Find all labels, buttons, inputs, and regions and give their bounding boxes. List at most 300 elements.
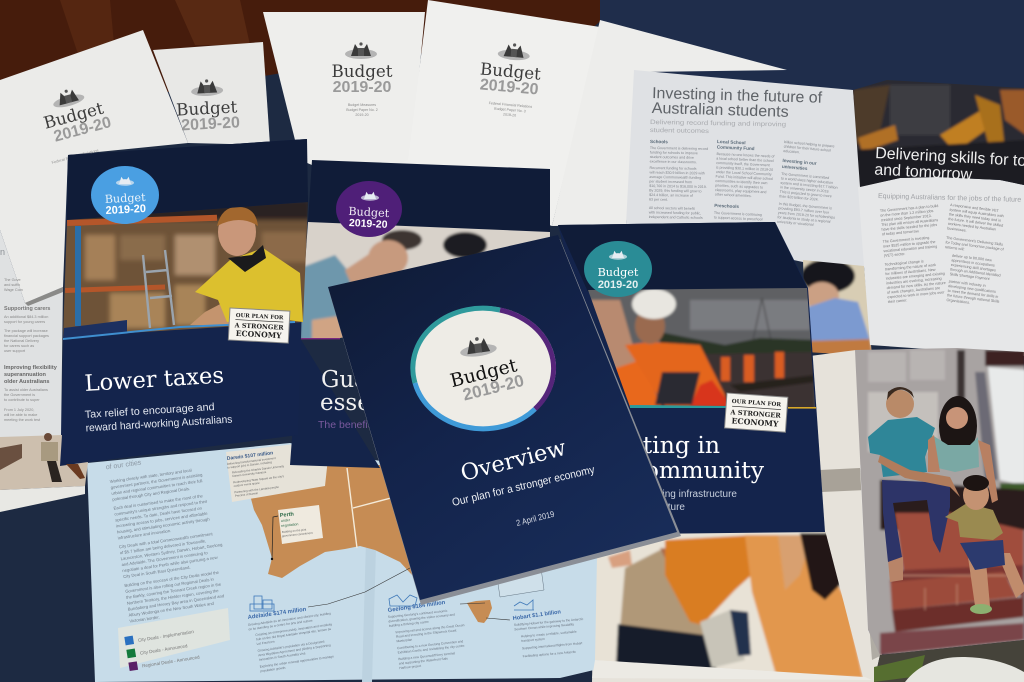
document: Budget paper 3: [263, 12, 425, 170]
column 2: to support access to preschool: [714, 215, 763, 222]
text: Supporting carers: [4, 306, 50, 312]
icon: Adelaide: [250, 596, 274, 611]
circle logo: [336, 181, 402, 237]
text: To assist older Australians: [4, 388, 48, 392]
icon: Geelong: [389, 595, 417, 606]
column 1: per student increased from: [649, 179, 692, 184]
Geelong section: Improving rail and access along the Great Ocean: [395, 623, 465, 634]
column 2: [714, 139, 775, 222]
subtitle: Tax relief to encourage and: [84, 401, 215, 421]
Darwin callout: Darwin University Campus: [232, 470, 267, 478]
document: Budget paper 2: [153, 42, 270, 145]
column 2: community itself, the Government: [716, 161, 770, 167]
left page text: Working closely with state, territory and local: [109, 468, 192, 484]
footer strip: [592, 660, 872, 680]
left page text: of our cities: [105, 459, 142, 471]
left page text: Building on the success of the City Deals model the: [124, 570, 220, 588]
label: Budget: [41, 98, 106, 133]
heading: [651, 85, 823, 122]
text: for carers such as: [4, 344, 34, 348]
column 2: Preschools: [714, 203, 740, 209]
circle logo: 2019-20: [349, 217, 388, 231]
Adelaide section: hub on the old Royal Adelaide Hospital site, known as: [256, 627, 332, 642]
body column 1: transforming the nature of work: [885, 263, 936, 271]
column 1: [649, 139, 708, 220]
document: blank sheet: [552, 20, 787, 226]
column 2: priorities, such as upgrades to: [715, 183, 763, 190]
body column 1: for millions of Australians. New: [885, 268, 936, 276]
body column 1: industries are evolving, increasing: [886, 277, 942, 285]
photo: rail workers: [585, 285, 817, 410]
column 1: student outcomes and drive: [650, 155, 694, 160]
Hobart section: Facilitating options for a new Antarctic: [523, 650, 577, 658]
column 2: communities to identify their own: [715, 179, 768, 185]
label: 2019-20: [461, 371, 526, 405]
label: 2019-20: [52, 114, 113, 146]
Geelong section: Masterplan: [396, 638, 413, 643]
caption: Federal Financial Relations: [51, 148, 99, 165]
crest: [458, 335, 498, 359]
label: 2019-20: [479, 76, 539, 98]
column 2: The Government is continuing: [714, 211, 762, 217]
Adelaide section: Innovation in South Australia visa: [259, 651, 306, 662]
text: the National Delivery: [4, 339, 39, 343]
column 1: All school sectors will benefit: [649, 206, 695, 211]
body column 2: Skills Shortage Payment: [949, 272, 990, 281]
left page text: Each deal is customised to make the most of the: [113, 493, 204, 511]
body column 1: on the more than 1.2 million jobs: [880, 209, 934, 218]
left page text: Victorian border.: [129, 614, 160, 624]
column 3: universities: [782, 164, 808, 171]
heading: Investing in the future of: [652, 85, 823, 107]
person: [41, 433, 85, 482]
column 3: The Government is committed: [781, 172, 829, 180]
body column 1: Technological change is: [884, 259, 924, 267]
stamp: ECONOMY: [236, 329, 282, 340]
caption: [346, 103, 378, 117]
Perth callout: [271, 505, 323, 560]
stone column: [866, 585, 882, 660]
body column 1: over $525 million to upgrade the: [883, 240, 936, 249]
cut-off heading: n: [0, 247, 5, 257]
body column 2: workers needed by Australian: [948, 222, 996, 232]
body column 2: [938, 203, 1011, 308]
subtitle: The benefits: [318, 419, 376, 431]
Geelong section: Geelong $184 million: [387, 600, 446, 614]
column 2: Local School: [717, 139, 746, 145]
left page: [626, 70, 870, 268]
text: From 1 July 2020,: [4, 408, 34, 412]
column 1: with increased funding for public,: [649, 210, 701, 215]
Geelong section: Building a new Queenscliff ferry terminal: [398, 651, 456, 661]
column 3: providing $93.7 million over four: [778, 206, 830, 215]
column 2: Because no one knows the needs of: [716, 152, 775, 159]
column 2: is providing $30.1 million in 2019-20: [716, 165, 773, 172]
body column 2: system will equip Australians with: [949, 208, 1004, 218]
text: meeting the work test: [4, 418, 41, 422]
stamp: OUR PLAN FOR: [236, 313, 284, 321]
legend: City Deals - Announced: [140, 643, 188, 656]
photo: [0, 435, 88, 490]
icon: Hobart: [514, 600, 534, 610]
Darwin callout: Relocating the Charles Darwin University: [232, 464, 285, 474]
body column 1: their career.: [888, 298, 907, 304]
body column 2: deliver up to 80,000 new: [952, 254, 992, 263]
column 1: $10,700 in 2014 to $16,000 in 2019.: [649, 184, 707, 189]
booklet spread: education and skills: [626, 70, 1024, 360]
body column 1: (VET) sector.: [884, 252, 905, 258]
caption: Budget Paper No. 3: [494, 107, 526, 113]
stamp: A STRONGER: [233, 321, 284, 332]
column 3: In this Budget, the Government is: [779, 202, 832, 210]
photo: warehouse: [60, 200, 310, 345]
title: Guaranteeing: [321, 367, 481, 393]
body column 1: of work changes, Australians are: [887, 286, 940, 295]
subheading: Delivering record funding and improving: [650, 119, 787, 128]
caption: Federal Financial Relations: [489, 101, 533, 109]
Adelaide section: Creating an entrepreneurship, innovation and creativity: [255, 622, 333, 637]
label: Budget: [332, 61, 393, 81]
connector: [308, 568, 410, 607]
title: Overview: [458, 435, 569, 487]
column 1: will reach $30.9 billion in 2029 with: [649, 170, 705, 175]
arm: [0, 444, 22, 470]
body column 1: The Government has a plan to build: [880, 204, 939, 213]
child: [945, 475, 1024, 614]
left page text: Launceston, Western Sydney, Darwin, Hobart, Geelong: [120, 542, 223, 561]
body column 2: reforms will:: [945, 245, 965, 251]
white column: [860, 460, 892, 632]
column 2: under the Local School Community: [716, 170, 772, 176]
body column 1: expected to work in more jobs over: [887, 290, 945, 299]
label: Budget: [448, 355, 520, 392]
heading: skills: and tomorrow: [874, 161, 973, 184]
photo page: mother and child: [590, 525, 872, 682]
subtitle: reward hard-working Australians: [85, 414, 233, 434]
booklet: Lower taxes: [60, 139, 310, 466]
booklet: family photo spread: [592, 345, 1024, 682]
Geelong section: diversification, growing the visitor economy and: [388, 612, 455, 623]
text: and suffix: [4, 283, 20, 287]
column 3: billion school helping to prepare: [784, 140, 835, 148]
Geelong section: Harbour project: [399, 664, 421, 670]
Geelong section: Exhibition Centre and revitalising the city centre: [397, 644, 465, 655]
column 3: years from 2019-20 for scholarships: [778, 211, 835, 220]
left page strip: [592, 350, 893, 682]
ground: [874, 640, 1024, 682]
column 3: university or vocational: [777, 220, 814, 227]
left page text: of $5.7 billion are being delivered in Townsville,: [119, 538, 207, 555]
label: [41, 97, 113, 147]
Geelong section: [387, 595, 469, 671]
caption: Budget Measures: [348, 103, 376, 107]
blue rule: [63, 321, 295, 340]
body column 1: created since September 2013.: [881, 214, 932, 222]
Tasmania map: [467, 600, 492, 623]
photo: welding: [850, 78, 1024, 190]
body column 1: vocational education and training: [883, 245, 937, 253]
spine shading: [362, 470, 378, 682]
left page text: and Adelaide. The Government is continuing to: [121, 550, 209, 567]
left page text: the Barkly, covering the Tennant Creek region in the: [126, 581, 222, 600]
teal rule: [630, 405, 726, 408]
text: will be able to make: [4, 413, 37, 417]
body column 1: industries are emerging and existing: [886, 272, 945, 281]
photo: [595, 532, 863, 677]
left page text: specific needs. To date, Deals have focused on: [115, 505, 203, 523]
Tasmania markers: [460, 603, 510, 620]
label: 2019-20: [181, 114, 240, 134]
Adelaide section: Growing Adelaide's population via a Designated: [257, 640, 325, 653]
Adelaide section: Area Migration Agreement and piloting a Supporting: [258, 643, 331, 657]
left page text: City Deals with a total Commonwealth commitment: [119, 531, 214, 549]
Perth callout: government commitment: [282, 531, 313, 538]
column 2: Community Fund: [717, 144, 755, 151]
label: [448, 354, 526, 407]
map: Australia mainland: [250, 465, 412, 578]
left page text: housing, and stimulating economic activity through: [117, 516, 211, 534]
left page text: community's unique strengths and respond to their: [114, 499, 208, 517]
column 3: [777, 140, 842, 229]
body column 2: the future through national Skills: [947, 293, 1000, 304]
subheading: student outcomes: [650, 127, 709, 135]
column 1: $24.4 billion, an increase of: [649, 193, 693, 198]
crest: [345, 42, 377, 59]
text: Improving flexibility: [4, 365, 58, 371]
Hobart section: Supporting international flights from Hobart: [522, 641, 583, 650]
title: Lower taxes: [84, 363, 225, 397]
Hobart section: Solidifying Hobart for the gateway to the Antarctic: [514, 617, 584, 627]
subtitle: for the future: [628, 502, 685, 513]
Darwin callout: Precinct of Darwin: [235, 491, 259, 498]
Adelaide section: Lot Fourteen: [256, 639, 275, 646]
photo: family on steps: [850, 345, 1024, 655]
legend: [118, 608, 230, 671]
column 3: in the university sector in 2019.: [780, 185, 830, 194]
text: The package will increase: [4, 329, 48, 333]
column 3: education.: [783, 149, 800, 154]
title: Investing in: [579, 431, 720, 459]
window band: [820, 468, 866, 492]
crest: [50, 86, 86, 110]
body column 1: This plan will ensure all Australians: [881, 218, 938, 227]
Darwin callout: outdoor event space: [233, 481, 260, 488]
title: [579, 431, 765, 484]
text: older Australians: [4, 379, 50, 385]
body column 2: for Today and Tomorrow package of: [945, 240, 1005, 252]
column 3: This is projected to grow to more: [780, 190, 832, 198]
column 3: to a world class higher education: [781, 176, 833, 185]
Hobart section: [512, 600, 587, 659]
ring: [413, 308, 554, 429]
text: The Gove: [4, 278, 21, 282]
column 1: Schools: [650, 139, 668, 144]
booklet: Guaranteeing essential services: [290, 160, 552, 468]
column 2: a local school better than the school: [716, 156, 774, 163]
legend: Regional Deals - Announced: [142, 654, 200, 669]
circle logo: Budget: [348, 205, 390, 220]
strip: [0, 486, 85, 512]
crest: [497, 42, 531, 61]
text: Wage Com: [4, 288, 23, 292]
caption: 2019-20: [355, 113, 369, 117]
text: support for young carers: [4, 320, 45, 324]
left page text: Albury Wodonga on the New South Wales and: [128, 601, 215, 618]
title: our community: [584, 456, 765, 484]
subtitle: Our plan for a stronger economy: [451, 464, 596, 509]
booklet: Investing in our community: [558, 222, 825, 534]
column 1: The Government is delivering record: [650, 146, 708, 151]
Darwin callout: Delivering transformational investment: [227, 456, 276, 466]
left page text: [105, 450, 232, 624]
stamp: [725, 393, 788, 432]
body column 1: [880, 204, 947, 304]
body column 2: the skills they need today and in: [949, 212, 1001, 223]
document: Budget paper 4: [385, 0, 600, 226]
body column 2: businesses.: [947, 226, 967, 233]
circle logo: Budget: [598, 266, 639, 279]
yellow rule: [788, 407, 816, 409]
grass: [874, 655, 925, 682]
title: [320, 367, 526, 416]
Darwin callout: to support jobs in Darwin, including: [227, 460, 272, 470]
text: user support: [4, 349, 26, 353]
text: An additional $84.3 million: [4, 315, 48, 319]
body column 2: A responsive and flexible VET: [950, 203, 1000, 213]
Hobart section: transport system: [521, 637, 545, 643]
body column 2: through an Additional Identified: [950, 268, 1001, 278]
stamp: [228, 308, 290, 343]
Geelong section: building a thriving city centre: [389, 620, 429, 628]
map: borders: [347, 468, 391, 548]
column 1: funding for schools to improve: [650, 150, 698, 155]
Adelaide section: Adelaide $174 million: [247, 607, 307, 621]
column 1: By 2029, this funding will grow to: [649, 188, 702, 193]
body column 2: developing new qualifications: [948, 284, 996, 294]
Darwin callout: Darwin $107 million: [227, 450, 274, 462]
label: Budget: [176, 96, 238, 120]
band: [63, 320, 127, 338]
column 3: Investing in our: [782, 158, 817, 166]
column 1: independent and Catholic schools: [649, 215, 703, 220]
text: the Government is: [4, 393, 35, 397]
Geelong section: Road and investing in the Shipwreck Coast: [396, 628, 457, 639]
label: [478, 58, 542, 99]
crest: [191, 79, 223, 97]
left page text: urban and regional communities to reach their full: [111, 478, 203, 496]
body column 2: experiencing skill shortages: [951, 263, 996, 272]
body column 1: The Government is investing: [882, 236, 930, 244]
booklet: Overview: [328, 235, 681, 605]
title: essential services: [320, 390, 526, 416]
subheading: skills: Equipping Australians for the jobs of the future: [878, 193, 1021, 204]
Adelaide section: Growing Adelaide as an innovative and vibrant city, building: [248, 611, 331, 627]
heading: skills: [874, 145, 1024, 188]
Perth callout: negotiation: [281, 522, 299, 528]
subheading: [650, 119, 787, 136]
circle logo: Budget: [104, 191, 146, 206]
text: to contribute to super: [4, 398, 40, 402]
stamp: OUR PLAN FOR: [731, 399, 782, 408]
body column 2: to meet the demand for skills in: [947, 289, 999, 299]
Darwin callout: [226, 440, 330, 502]
circle logo: [91, 166, 159, 224]
body column 2: partner with industry in: [949, 279, 986, 288]
Adelaide section: population growth: [260, 666, 286, 673]
left page text: City Deal in South East Queensland.: [123, 565, 191, 579]
purple rule: [300, 338, 340, 339]
column 3: than $20 billion for 2024.: [779, 194, 819, 202]
Darwin callout: Redeveloping State Square as the city's: [233, 474, 285, 484]
column 2: Fund. This initiative will allow school: [715, 174, 773, 181]
Adelaide section: on its standing as a centre for arts and culture: [248, 618, 313, 631]
legend: City Deals - Implementation: [138, 629, 195, 643]
column 2: classrooms, play equipment and: [715, 188, 767, 194]
text: financial support packages: [4, 334, 49, 338]
text: superannuation: [4, 372, 47, 378]
caption: Budget Paper No. 2: [346, 108, 378, 112]
photo: man: [300, 220, 552, 345]
man: [868, 387, 960, 582]
heading: Australian students: [651, 100, 789, 121]
Geelong section: Supporting Geelong's continued economic: [388, 609, 448, 619]
woman: [928, 396, 998, 503]
label: [332, 61, 393, 96]
body column 2: apprentices in occupations: [951, 258, 995, 268]
Hobart section: Helping to create a reliable, sustainable: [521, 630, 577, 638]
column 1: Recurrent funding for schools: [650, 166, 697, 171]
Hobart section: Hobart $1.1 billion: [512, 609, 562, 622]
left page text: government partners, the Government is assisting: [110, 472, 203, 490]
caption: [488, 101, 533, 119]
Adelaide section: [247, 568, 410, 674]
column 3: children for their future school: [784, 144, 831, 153]
caption: 2019-20: [503, 112, 516, 118]
left page text: negotiate a deal for Perth while also pursuing a new: [122, 555, 219, 573]
column 3: for students to study at a regional: [777, 215, 831, 224]
page shadow: [25, 287, 63, 306]
subtitle: Supporting infrastructure: [627, 489, 737, 500]
photo: boy student: [803, 260, 872, 354]
column 1: 63 per cent.: [649, 197, 668, 202]
body column 2: the future. It will deliver the skilled: [948, 217, 1003, 228]
stamp: A STRONGER: [729, 408, 782, 420]
Darwin callout: Partnering with the Larrakia people: [234, 485, 280, 494]
body column 1: of today and tomorrow.: [882, 229, 920, 236]
left page: carers text and photo: [0, 230, 88, 512]
left page text: increasing access to jobs, services and affordable: [116, 511, 208, 529]
badge: [412, 306, 556, 430]
left page text: Government is also rolling out Regional Deals in: [125, 576, 215, 594]
Adelaide section: Exploring the urban renewal opportunities to manage: [260, 654, 334, 669]
column 3: system and is investing $17.7 billion: [780, 181, 838, 190]
Perth callout: Building on the joint: [282, 527, 307, 534]
left page text: Northern Territory, the Hinkler region, covering the: [127, 588, 219, 606]
subtitle: [627, 489, 737, 513]
label: [176, 96, 240, 135]
Hobart section: Southern Ocean while improving liveability: [514, 622, 575, 631]
left page text: infrastructure and innovation.: [117, 528, 172, 540]
document: Budget paper left: [0, 30, 188, 303]
body column 1: have the skills needed for the jobs: [881, 223, 937, 232]
booklet spread: City Deals map: [87, 440, 675, 682]
Geelong section: and supporting the Waterfront Safe: [399, 656, 448, 666]
white bag: [905, 657, 1024, 682]
body column 2: Organisations.: [946, 298, 970, 305]
text: [4, 278, 58, 422]
body column 2: The Government's Delivering Skills: [946, 236, 1003, 247]
right page: [858, 177, 1024, 356]
